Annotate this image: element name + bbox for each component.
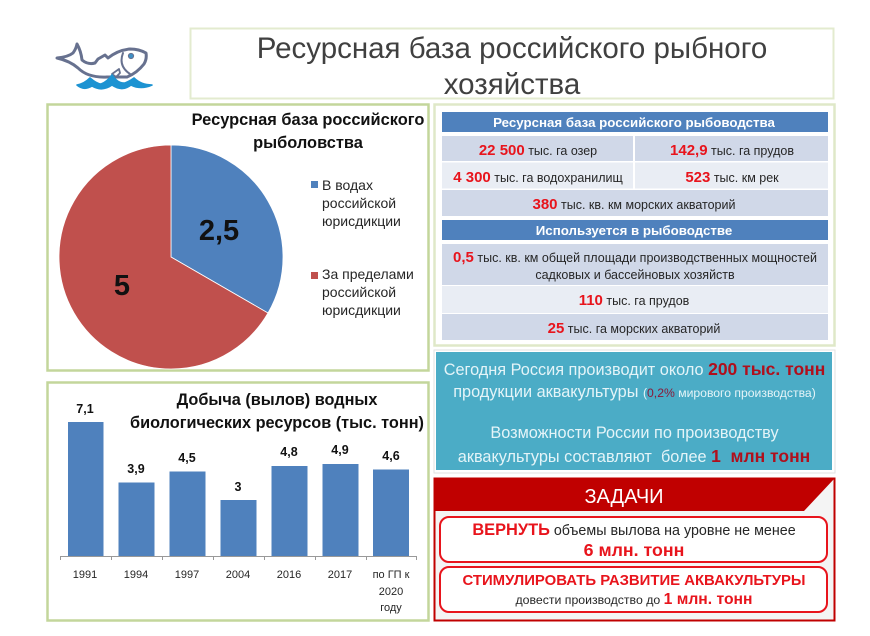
panel: pie chart [48, 104, 428, 370]
category labels: 1997 [175, 569, 199, 581]
legend: В водах [322, 177, 373, 193]
category labels: 2020 [379, 586, 403, 598]
value labels: 3,9 [127, 462, 145, 476]
legend: юрисдикции [322, 302, 401, 318]
category labels: по ГП к [373, 569, 410, 581]
category labels: 2004 [226, 569, 250, 581]
bars [68, 422, 409, 556]
header: resource base: Ресурсная база российского рыбоводства [493, 115, 775, 130]
category labels: году [380, 602, 402, 614]
panel: bar chart [48, 382, 428, 620]
category labels: 2016 [277, 569, 301, 581]
value labels: 7,1 [76, 402, 94, 416]
value labels: 4,8 [280, 445, 298, 459]
value labels: 4,9 [331, 443, 349, 457]
title box [190, 28, 834, 101]
data label 2,5: 2,5 [199, 215, 239, 247]
value labels [76, 402, 400, 494]
pie chart [59, 145, 283, 369]
table rows used: 25 тыс. га морских акваторий [548, 320, 720, 337]
table rows used [442, 244, 828, 340]
table rows: 22 500 тыс. га озер [479, 142, 597, 159]
table rows used: садковых и бассейновых хозяйств [535, 268, 735, 282]
panel: aquaculture callout: аквакультуры составляют более 1 млн тонн [458, 446, 810, 466]
chart title: Добыча (вылов) водных [177, 391, 377, 409]
header: resource base [442, 112, 828, 132]
table rows [442, 136, 828, 216]
legend: За пределами [322, 266, 414, 282]
icon: fish logo [57, 44, 152, 89]
value labels: 3 [235, 480, 242, 494]
category labels: 2017 [328, 569, 352, 581]
title text: хозяйства [444, 68, 581, 101]
task 2 [440, 567, 827, 612]
table rows: 142,9 тыс. га прудов [670, 142, 794, 159]
chart title: Ресурсная база российского [192, 111, 424, 129]
panel: aquaculture callout: Сегодня Россия производит около 200 тыс. тонн [444, 359, 825, 379]
table rows: 4 300 тыс. га водохранилищ [453, 169, 623, 186]
value labels: 4,6 [382, 449, 400, 463]
chart title: рыболовства [253, 134, 364, 152]
legend: российской [322, 284, 396, 300]
legend [311, 177, 414, 318]
legend: российской [322, 195, 396, 211]
tasks header: ЗАДАЧИ [584, 486, 664, 508]
category labels: 1991 [73, 569, 97, 581]
task 1: 6 млн. тонн [584, 540, 684, 560]
title text: Ресурсная база российского рыбного [257, 32, 767, 65]
category labels: 1994 [124, 569, 148, 581]
chart title: биологических ресурсов (тыс. тонн) [130, 414, 424, 432]
task 1: ВЕРНУТЬ объемы вылова на уровне не менее [472, 521, 796, 539]
table rows used: 0,5 тыс. кв. км общей площади производственных мощностей [453, 249, 817, 266]
header: used in fish farming: Используется в рыбоводстве [536, 223, 732, 238]
legend: юрисдикции [322, 213, 401, 229]
panel: aquaculture callout [434, 350, 835, 473]
data label 5: 5 [114, 270, 130, 302]
header: used in fish farming [442, 220, 828, 240]
panel: resource table [434, 104, 834, 346]
task 1 [440, 517, 827, 562]
table rows used: 110 тыс. га прудов [579, 292, 690, 309]
value labels: 4,5 [178, 451, 196, 465]
panel: tasks [434, 478, 834, 620]
panel: aquaculture callout: продукции аквакультуры (0,2% мирового производства) [453, 383, 816, 401]
axis [60, 556, 417, 560]
table rows: 380 тыс. кв. км морских акваторий [533, 196, 735, 213]
panel: aquaculture callout: Возможности России по производству [490, 424, 779, 442]
task 2: довести производство до 1 млн. тонн [515, 591, 753, 608]
tasks header [435, 479, 834, 511]
task 2: СТИМУЛИРОВАТЬ РАЗВИТИЕ АКВАКУЛЬТУРЫ [462, 573, 806, 589]
category labels [73, 569, 410, 614]
table rows: 523 тыс. км рек [685, 169, 779, 186]
